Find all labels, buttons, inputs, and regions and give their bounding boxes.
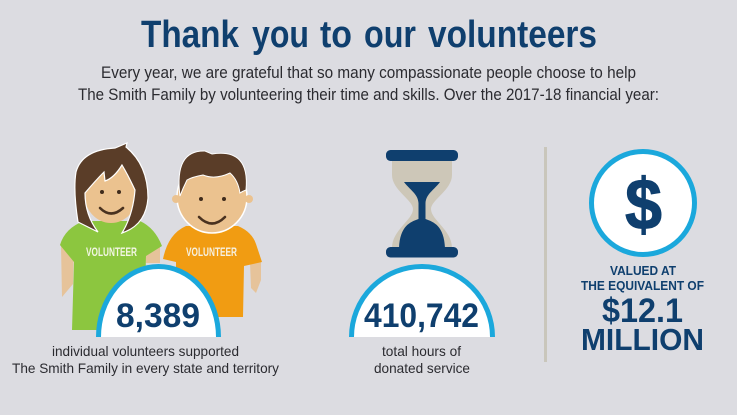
- title: to: [320, 14, 352, 56]
- caption: hours: [374, 343, 470, 376]
- icon: dollar coin: [592, 152, 694, 254]
- stat badge: 410,742: 410,742: [364, 297, 479, 335]
- title: volunteers: [428, 14, 597, 56]
- intro text: Every year, we are grateful that so many compassionate people choose to help: [101, 63, 636, 82]
- caption: hours: donated service: [374, 360, 470, 376]
- value text: $12.1: [602, 292, 683, 330]
- illustration: girl volunteer: VOLUNTEER: [86, 247, 137, 259]
- caption: volunteers: The Smith Family in every state and territory: [12, 360, 279, 376]
- caption: volunteers: individual volunteers supported: [52, 343, 239, 359]
- title: [141, 14, 597, 56]
- illustration: boy volunteer: VOLUNTEER: [186, 247, 237, 259]
- icon: hourglass: [386, 150, 458, 258]
- title: Thank: [141, 14, 240, 56]
- intro text: [78, 63, 659, 104]
- value text: VALUED AT: [610, 263, 676, 278]
- value text: [581, 263, 704, 357]
- stat badge: 8,389: [98, 266, 218, 337]
- panel: volunteers: [12, 143, 279, 376]
- stat badge: 8,389: 8,389: [116, 297, 200, 335]
- intro text: The Smith Family by volunteering their time and skills. Over the 2017-18 financial year:: [78, 85, 659, 104]
- illustration: boy volunteer: [163, 151, 262, 317]
- caption: volunteers: [12, 343, 279, 376]
- panel: hours: [352, 150, 492, 376]
- stat badge: 410,742: [352, 266, 492, 337]
- title: you: [252, 14, 309, 56]
- value text: THE EQUIVALENT OF: [581, 278, 704, 293]
- value text: MILLION: [581, 322, 704, 357]
- title: our: [364, 14, 416, 56]
- icon: dollar coin: $: [625, 165, 662, 245]
- illustration: girl volunteer: [60, 143, 162, 330]
- caption: hours: total hours of: [382, 343, 461, 359]
- panel: value: [581, 152, 704, 357]
